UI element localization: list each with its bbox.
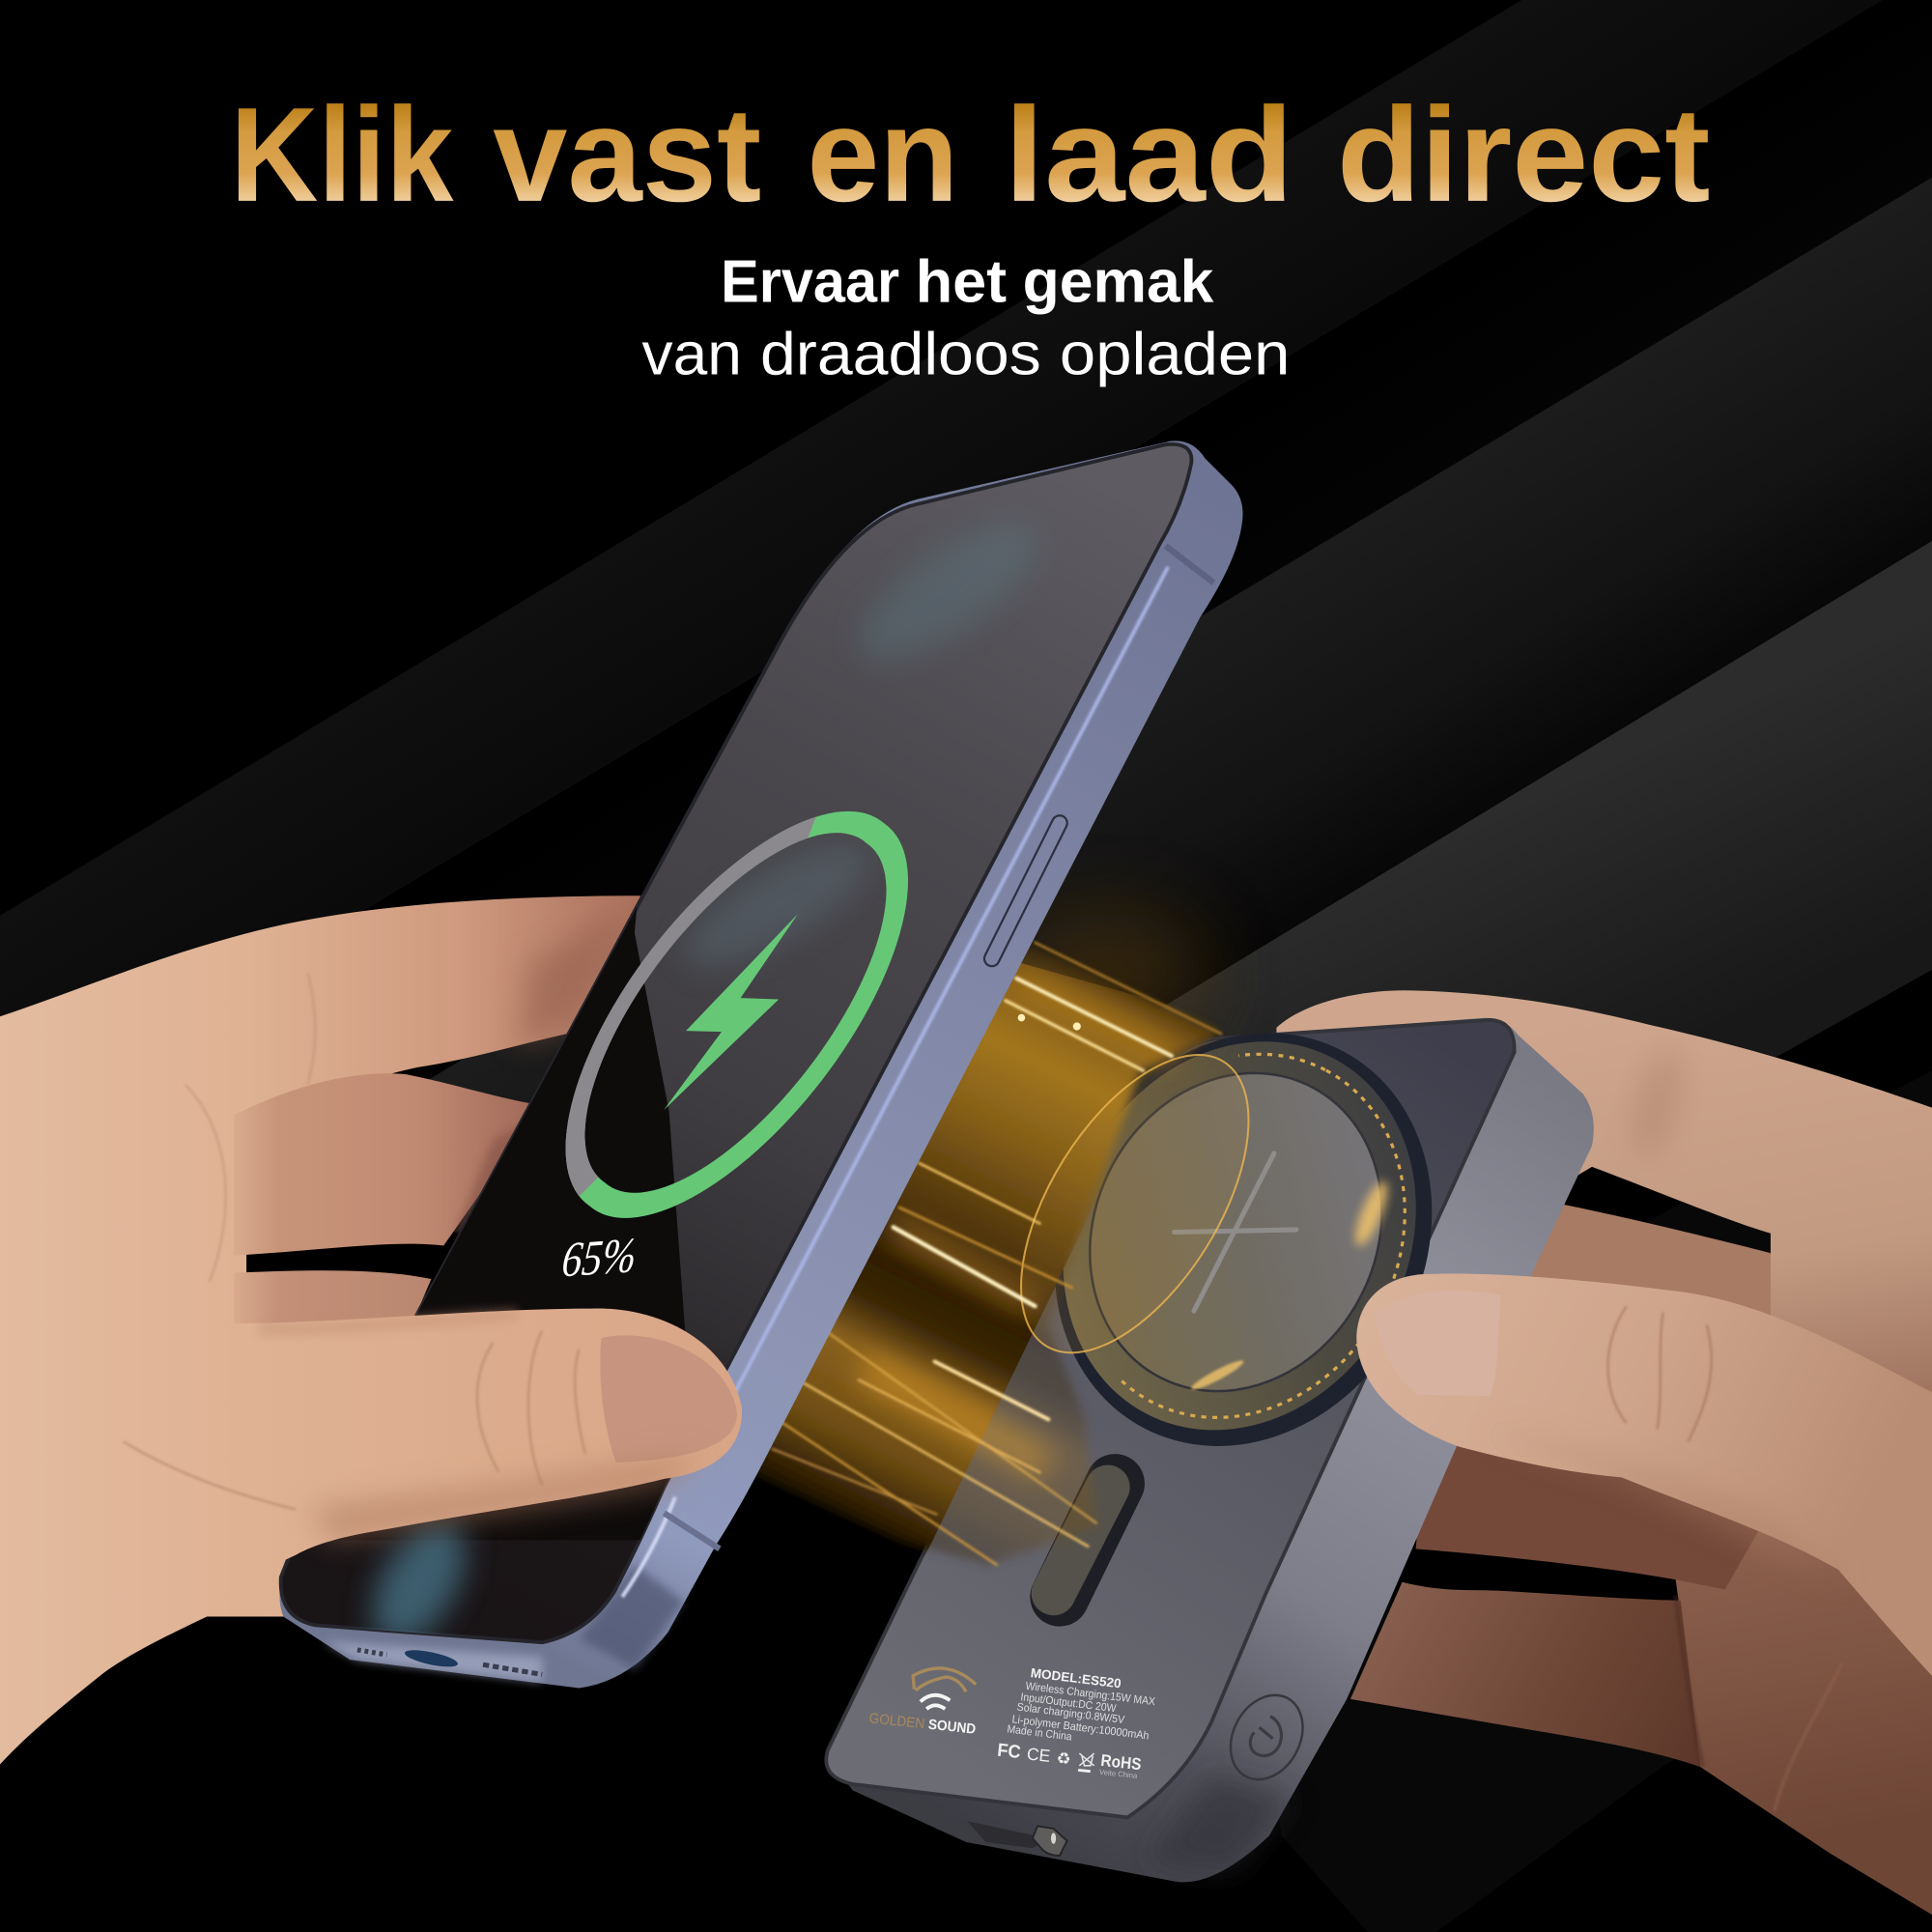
phone bottom corner shading (579, 1565, 684, 1669)
left ring finger (234, 1270, 431, 1337)
charging port (404, 1647, 459, 1670)
stream main body (739, 943, 1221, 1565)
headline: direct (1337, 80, 1710, 230)
stream soft bright lines (863, 979, 1172, 1466)
subheading line 1: Ervaar (721, 247, 899, 315)
subheading line 2: draadloos (760, 321, 1041, 388)
certification marks: FC (996, 1741, 1022, 1763)
headline: vast (493, 80, 761, 230)
left thumb knuckle wrinkles (124, 1331, 585, 1509)
ring green progress (566, 811, 908, 1218)
stream light sparks (1018, 1014, 1081, 1031)
side button (992, 823, 1060, 958)
right little finger (1350, 1582, 1700, 1767)
right index finger (1276, 990, 1932, 1355)
left index finger and back of hand (0, 895, 640, 1343)
golden charging energy stream (739, 912, 1294, 1565)
logo white waves (921, 1695, 950, 1709)
bottom antenna band (665, 1513, 720, 1548)
left thumb in front of the phone (0, 1306, 742, 1688)
top antenna band (1166, 546, 1213, 582)
specifications label: Solar charging:0.8W/5V (1016, 1701, 1125, 1726)
battery percentage: 65% (559, 1228, 639, 1288)
dark reflection on the left of the screen (336, 907, 686, 1540)
right thumb in front of the power bank (1356, 1273, 1932, 1676)
stream sharp light streaks (773, 943, 1221, 1565)
headline: Klik (231, 80, 454, 230)
left thumb shape (0, 1306, 742, 1688)
cross mark on disc (1175, 1153, 1296, 1311)
subheading line 1: gemak (1023, 247, 1214, 315)
specifications label: Wireless Charging:15W MAX (1025, 1681, 1156, 1708)
fingertip shadow near phone (518, 912, 629, 1047)
center blue glow (685, 844, 866, 969)
right middle finger (1516, 1198, 1771, 1331)
palm crease (1676, 1596, 1703, 1767)
right thumb underside shade (1479, 1430, 1848, 1583)
right ring finger (1416, 1405, 1775, 1589)
headline: en (807, 80, 958, 230)
bottom connector (967, 1821, 1067, 1856)
certification marks: Veite China (1099, 1768, 1139, 1780)
side button face (992, 823, 1060, 958)
subheading line 2: opladen (1060, 321, 1290, 388)
specifications label: MODEL:ES520 (1030, 1665, 1122, 1690)
speaker grille right (483, 1664, 542, 1674)
power button (1216, 1683, 1317, 1792)
ring grey remainder (566, 817, 816, 1196)
screen reflections (246, 499, 1057, 1661)
certification marks: CE (1026, 1745, 1051, 1766)
translucent gold over disc (975, 1017, 1294, 1390)
power bank bottom shading (1146, 1775, 1293, 1873)
certification marks (996, 1741, 1143, 1780)
right thumb shape (1356, 1273, 1932, 1676)
battery ring (566, 811, 908, 1218)
ring highlight (1350, 1178, 1393, 1249)
magnetic ring outer (983, 966, 1503, 1513)
stream over the power bank, translucent (739, 943, 1221, 1565)
top blue glow (864, 528, 1030, 659)
magnet pill (1054, 1484, 1115, 1597)
lightning bolt icon (664, 914, 798, 1110)
brand logo (868, 1668, 977, 1738)
lower frame highlight (622, 1497, 675, 1597)
certification marks: ♻ (1056, 1748, 1071, 1769)
specifications label: Li-polymer Battery:10000mAh (1011, 1714, 1150, 1743)
left hand: palm and fingers behind the phone (0, 895, 640, 1765)
logo gold arcs (913, 1668, 976, 1691)
phone bottom edge highlight (323, 1641, 542, 1682)
magnetic ring band (996, 980, 1483, 1492)
left thumb nail (600, 1335, 737, 1463)
right thumb knuckle wrinkles (1608, 1306, 1712, 1441)
knuckle creases (185, 974, 315, 1282)
middle finger knuckle shadow (456, 1115, 542, 1233)
thumb top shadow on palm (259, 1309, 518, 1336)
certification marks: RoHS (1100, 1750, 1143, 1774)
phone titanium frame (279, 440, 1243, 1688)
thumb underside shade (308, 1454, 702, 1540)
gold dotted ring (1121, 1053, 1406, 1419)
ring lower highlight (1189, 1357, 1246, 1393)
gold ring echo (975, 1017, 1294, 1390)
index knuckle shadow (1624, 1044, 1690, 1161)
subheading line 2: van (642, 321, 742, 388)
right palm (1676, 1108, 1932, 1915)
left middle finger (234, 1073, 542, 1256)
right thumb nail (1375, 1291, 1501, 1396)
power bank face (826, 1020, 1515, 1817)
left palm lower part (0, 1479, 370, 1765)
smartphone (246, 440, 1243, 1688)
headline: laad (1005, 80, 1293, 230)
bottom blue glow (355, 1517, 483, 1634)
specifications label: Made in China (1007, 1723, 1073, 1744)
charging disc (1035, 1021, 1436, 1443)
logo brand name: GOLDEN SOUND (868, 1711, 977, 1738)
specifications label (1007, 1665, 1156, 1744)
right hand: palm and fingers behind the power bank (1276, 990, 1932, 1915)
subheading line 1: het (916, 247, 1007, 315)
power bank (826, 966, 1594, 1882)
stream outer glow (1010, 912, 1208, 1035)
speaker grille left (357, 1650, 387, 1655)
palm line (1775, 1663, 1842, 1811)
frame highlight line (696, 567, 1168, 1466)
phone screen (281, 444, 1191, 1642)
power bank metal side (828, 1018, 1594, 1882)
specifications label: Input/Output:DC 20W (1020, 1691, 1117, 1715)
